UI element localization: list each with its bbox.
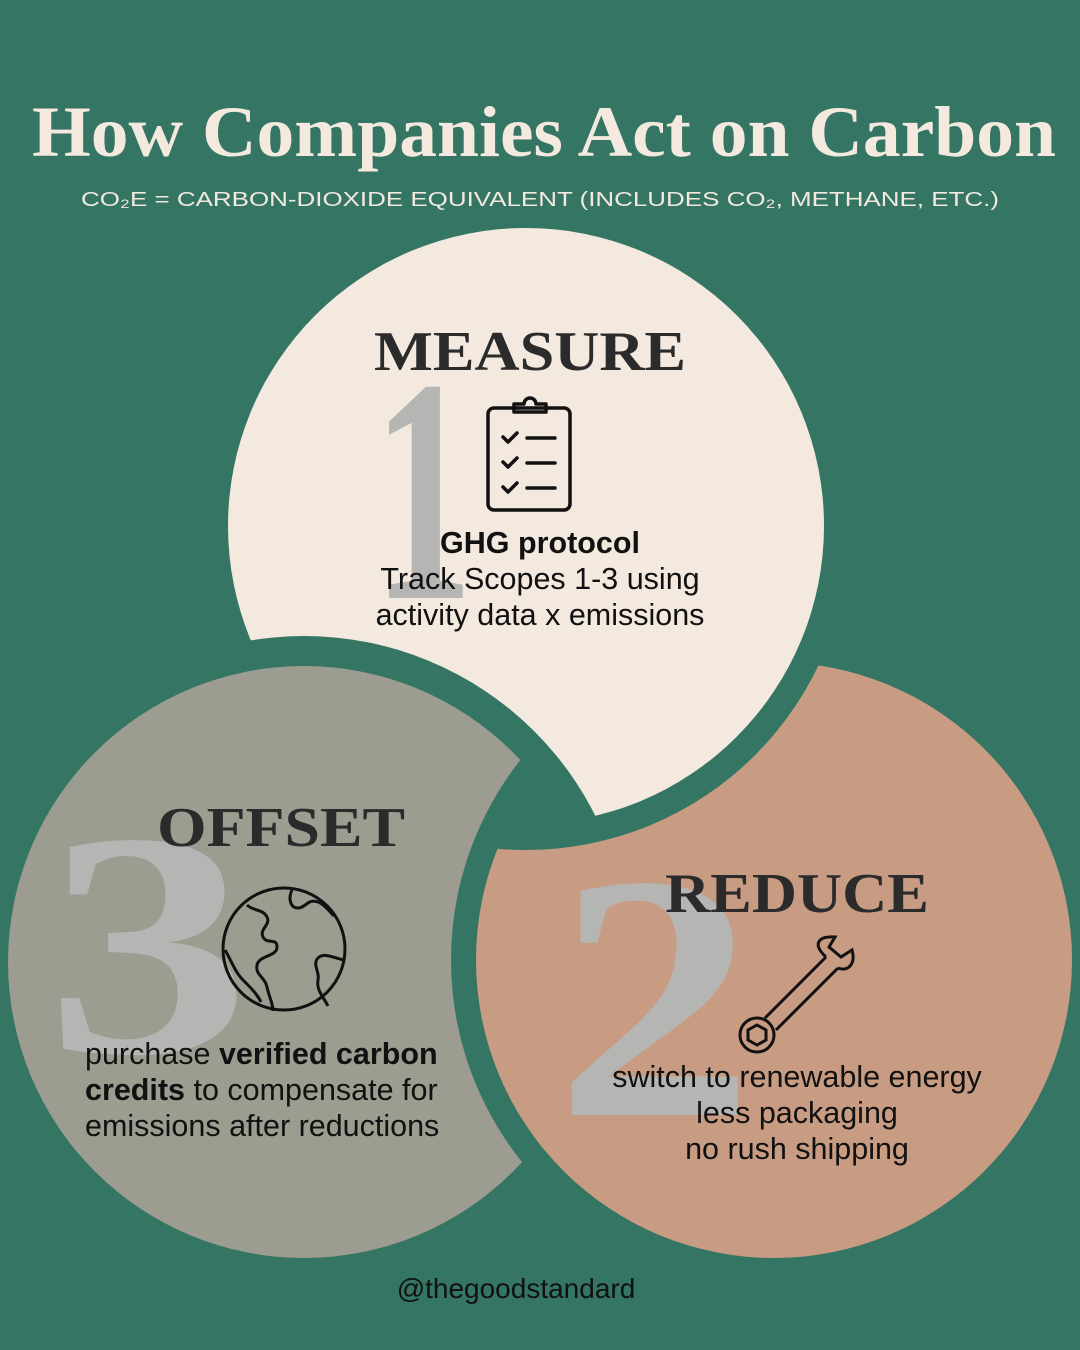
icon: globe	[223, 888, 345, 1011]
text: reduce: no rush shipping	[685, 1132, 909, 1166]
text: reduce: less packaging	[696, 1096, 898, 1130]
title: How Companies Act on Carbon	[32, 92, 1056, 172]
text: measure	[376, 526, 704, 632]
text: offset: emissions after reductions	[85, 1109, 439, 1143]
subtitle: CO₂E = CARBON-DIOXIDE EQUIVALENT (INCLUDES CO₂, METHANE, ETC.)	[81, 189, 999, 211]
text: reduce: switch to renewable energy	[612, 1060, 983, 1094]
heading: offset: OFFSET	[157, 797, 405, 859]
panel: offset	[8, 666, 522, 1258]
text: offset: purchase verified carbon	[85, 1037, 438, 1071]
big number 1: 1	[373, 314, 473, 668]
text: measure: GHG protocol	[440, 526, 640, 560]
footer handle: @thegoodstandard	[397, 1273, 635, 1304]
text: measure: activity data x emissions	[376, 598, 704, 632]
icon: clipboard	[488, 398, 570, 510]
heading: measure: MEASURE	[374, 321, 686, 383]
big number 3: 3	[46, 768, 250, 1122]
panel: reduce	[476, 662, 1072, 1258]
icon: wrench	[740, 937, 853, 1052]
text: offset	[85, 1037, 439, 1143]
text: reduce	[612, 1060, 983, 1166]
text: measure: Track Scopes 1-3 using	[380, 562, 700, 596]
panel: measure	[228, 228, 824, 824]
text: offset: credits to compensate for	[85, 1073, 438, 1107]
heading: reduce: REDUCE	[665, 863, 929, 925]
big number 2: 2	[555, 803, 755, 1191]
